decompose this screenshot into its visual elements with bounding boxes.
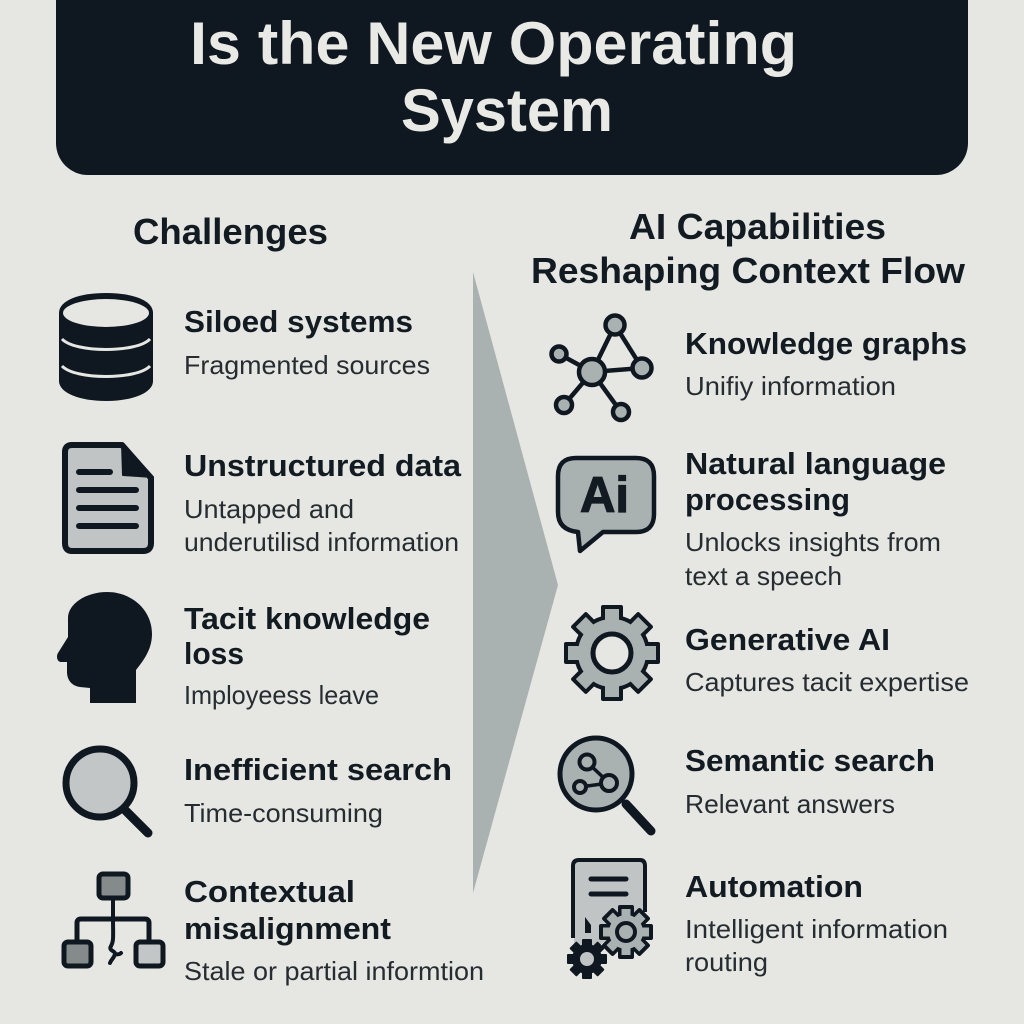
- title: System: [401, 77, 613, 144]
- text: siloed systems: Siloed systems: [184, 304, 413, 339]
- heading: AI capabilities: Reshaping Context Flow: [531, 250, 966, 291]
- icon: knowledge graph: [552, 316, 652, 420]
- text: generative AI: [685, 622, 969, 697]
- text: knowledge graphs: Unifiy information: [685, 371, 896, 401]
- title: Is the New Operating: [190, 10, 797, 77]
- title: [190, 10, 797, 144]
- text: natural language processing: [685, 446, 946, 591]
- icon: broken hierarchy: [64, 874, 163, 966]
- text: unstructured data: [184, 448, 462, 557]
- text: unstructured data: underutilisd information: [184, 527, 459, 557]
- text: contextual misalignment: misalignment: [184, 911, 391, 946]
- icon: gear: [566, 607, 658, 699]
- text: tacit knowledge loss: Imployeess leave: [184, 680, 379, 710]
- text: tacit knowledge loss: loss: [184, 636, 244, 671]
- text: automation: Automation: [685, 869, 863, 904]
- text: generative AI: Captures tacit expertise: [685, 667, 969, 697]
- heading: AI capabilities: AI Capabilities: [629, 206, 886, 247]
- icon: automation: [567, 860, 651, 979]
- icon: AI speech bubble: Ai: [580, 467, 629, 523]
- icon: database: [59, 293, 153, 401]
- text: contextual misalignment: [184, 874, 484, 986]
- text: inefficient search: [184, 752, 452, 828]
- text: automation: [685, 869, 948, 977]
- icon: document: [65, 443, 153, 551]
- text: siloed systems: Fragmented sources: [184, 350, 430, 380]
- text: contextual misalignment: Stale or partial informtion: [184, 956, 484, 986]
- text: semantic search: Relevant answers: [685, 789, 895, 819]
- text: natural language processing: Natural language: [685, 446, 946, 481]
- text: natural language processing: Unlocks insights from: [685, 527, 941, 557]
- heading: AI capabilities: [531, 206, 966, 291]
- central arrow: [473, 272, 558, 893]
- text: knowledge graphs: Knowledge graphs: [685, 326, 967, 361]
- text: semantic search: Semantic search: [685, 743, 935, 778]
- text: contextual misalignment: Contextual: [184, 874, 355, 909]
- text: natural language processing: text a speech: [685, 561, 842, 591]
- text: automation: routing: [685, 947, 768, 977]
- text: natural language processing: processing: [685, 482, 850, 517]
- text: unstructured data: Untapped and: [184, 494, 354, 524]
- icon: semantic search: [560, 738, 651, 831]
- icon: AI speech bubble: [558, 458, 654, 551]
- heading: challenges: Challenges: [133, 211, 328, 252]
- text: generative AI: Generative AI: [685, 622, 890, 657]
- text: inefficient search: Inefficient search: [184, 752, 452, 787]
- text: tacit knowledge loss: [184, 601, 430, 710]
- icon: magnifier: [66, 749, 148, 833]
- text: siloed systems: [184, 304, 430, 380]
- text: automation: Intelligent information: [685, 914, 948, 944]
- text: tacit knowledge loss: Tacit knowledge: [184, 601, 430, 636]
- icon: head: [57, 592, 152, 703]
- text: inefficient search: Time-consuming: [184, 798, 383, 828]
- header banner: [56, 0, 968, 175]
- text: knowledge graphs: [685, 326, 967, 401]
- text: unstructured data: Unstructured data: [184, 448, 462, 483]
- text: semantic search: [685, 743, 935, 819]
